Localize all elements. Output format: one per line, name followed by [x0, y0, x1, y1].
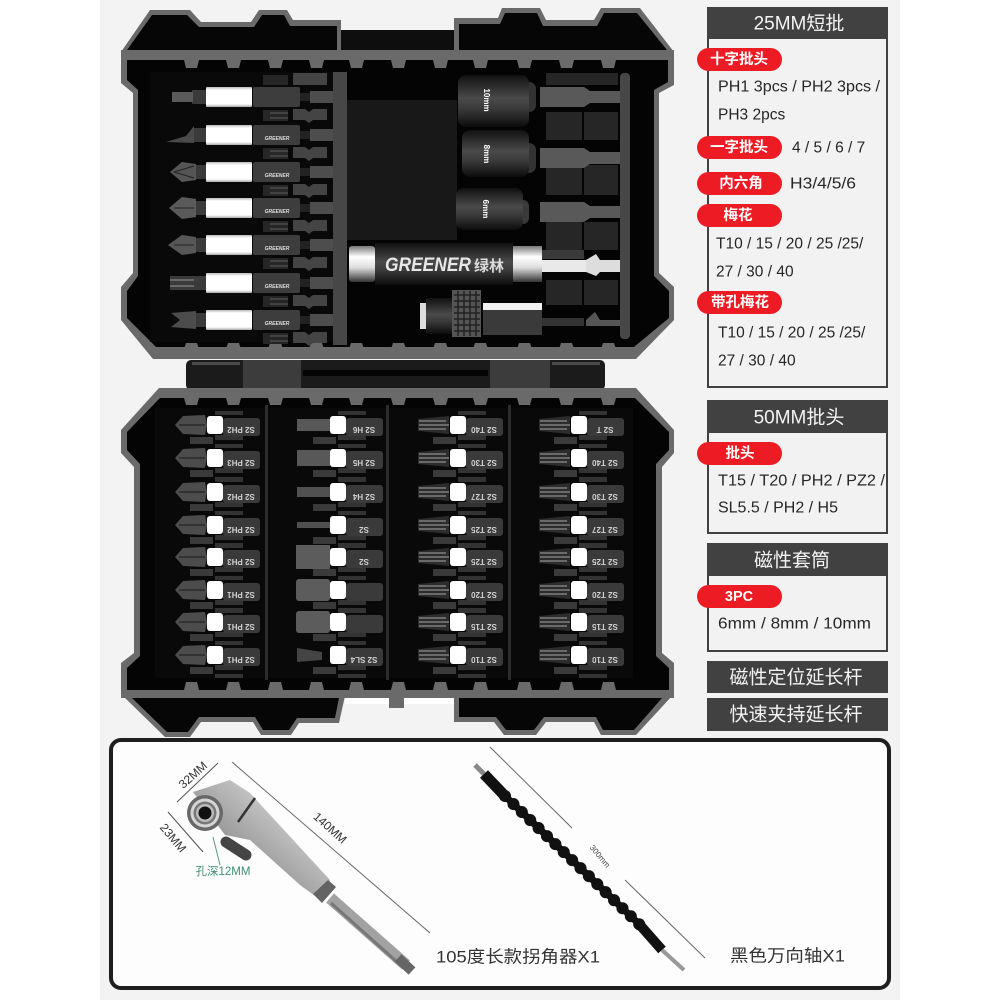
- bit column 3: Torx: S2 T20: [471, 590, 497, 599]
- text: Phillips sizes: PH3 2pcs: [718, 106, 785, 124]
- panel: magnetic sockets: [697, 543, 888, 651]
- seven 25mm bits, left column: GREENER: [265, 246, 290, 252]
- socket 10mm: 10mm: [482, 88, 491, 112]
- bar: magnetic extension: 磁性定位延长杆: [729, 666, 863, 688]
- label: angle adapter: 105度长款拐角器X1: [436, 948, 600, 966]
- callout: hole depth 12MM: [196, 837, 250, 878]
- tag: security Torx: [697, 291, 782, 314]
- heading: sockets: [707, 543, 888, 576]
- text: security Torx sizes: [718, 324, 866, 370]
- panel: accessories: [111, 740, 889, 988]
- panel: 50MM bits: [697, 400, 888, 533]
- bar: quick-release extension: [707, 698, 888, 731]
- bit column 1: Phillips and Pozidriv: S2 PH3: [227, 557, 255, 566]
- tag: 3PC: [697, 585, 782, 608]
- upper tray lid tabs: [121, 8, 674, 52]
- heading: 25MM: 25MM短批: [754, 12, 844, 34]
- magnetic extension bar with GREENER logo: GREENER: [385, 255, 471, 276]
- bit column 1: Phillips and Pozidriv: S2 PH2: [227, 525, 255, 534]
- bit column 2: hex and slotted: [296, 411, 383, 678]
- bit column 4: security Torx: S2 T30: [592, 492, 618, 501]
- socket 10mm: [458, 75, 620, 127]
- heading: 50MM: [707, 400, 888, 433]
- text: security Torx sizes: T10 / 15 / 20 / 25 /25/: [718, 324, 866, 342]
- text: security Torx sizes: 27 / 30 / 40: [718, 352, 796, 370]
- panel: 25MM short bits: [697, 7, 888, 387]
- heading: 25MM: [707, 7, 888, 39]
- bit column 3: Torx: S2 T10: [471, 655, 497, 664]
- lower tray body: [121, 388, 674, 698]
- flexible shaft tool: [475, 765, 684, 970]
- label: flexible shaft: 黑色万向轴X1: [730, 946, 845, 966]
- bit column 3: Torx: S2 T25: [471, 557, 497, 566]
- dimension 32MM: 32MM: [176, 759, 210, 791]
- bar: magnetic extension: [707, 661, 888, 693]
- text: Torx sizes: [716, 236, 864, 280]
- quick-release extension bar: [420, 290, 620, 337]
- tag: slotted: [697, 136, 782, 159]
- bit column 4: security Torx: S2 T: [596, 425, 613, 434]
- upper tray body: [121, 50, 674, 359]
- bit column 4: security Torx: S2 T25: [592, 557, 618, 566]
- text: Phillips sizes: PH1 3pcs / PH2 3pcs /: [718, 78, 881, 96]
- bit column 4: security Torx: S2 T27: [592, 525, 618, 534]
- tag: Phillips: [697, 48, 782, 71]
- seven 25mm bits, left column: GREENER: [265, 136, 290, 142]
- tag: bits: 批头: [726, 444, 754, 462]
- tag: hex: [697, 172, 782, 195]
- magnetic extension bar with GREENER logo: [349, 243, 620, 285]
- bit column 3: Torx: S2 T15: [471, 622, 497, 631]
- text: 50MM sizes: SL5.5 / PH2 / H5: [718, 500, 838, 516]
- dimension 140MM: [232, 762, 430, 933]
- bit column 1: Phillips and Pozidriv: S2 PH1: [227, 622, 255, 631]
- bit column 1: Phillips and Pozidriv: S2 PH3: [227, 458, 255, 467]
- dimension 300mm: 300mm: [588, 843, 612, 870]
- tag: bits: [697, 442, 782, 465]
- text: slotted sizes: 4 / 5 / 6 / 7: [792, 140, 865, 156]
- tag: Phillips: 十字批头: [710, 50, 768, 68]
- bit column 1: Phillips and Pozidriv: S2 PH1: [227, 590, 255, 599]
- bit column 4: security Torx: S2 T10: [592, 655, 618, 664]
- bit column 2: hex and slotted: S2 H5: [352, 458, 375, 467]
- seven 25mm bits, left column: GREENER: [265, 173, 290, 179]
- socket 6mm: 6mm: [481, 200, 490, 218]
- bit column 1: Phillips and Pozidriv: S2 PH2: [227, 492, 255, 501]
- seven 25mm bits, left column: [166, 73, 333, 346]
- tag: security Torx: 带孔梅花: [711, 293, 769, 311]
- tag: Torx: [697, 204, 782, 227]
- bit column 2: hex and slotted: S2: [359, 525, 369, 534]
- bit column 3: Torx: [418, 411, 503, 678]
- dimension 300mm: [490, 747, 705, 958]
- lower tray of the case: [121, 388, 674, 737]
- bit column 2: hex and slotted: S2: [359, 557, 369, 566]
- bit column 3: Torx: S2 T27: [471, 492, 497, 501]
- page background: [100, 0, 900, 1000]
- hinge: [186, 360, 605, 390]
- bit column 3: Torx: S2 T40: [471, 425, 497, 434]
- text: Phillips sizes: [718, 78, 881, 124]
- bar: quick-release extension: 快速夹持延长杆: [729, 704, 863, 726]
- text: hex sizes: H3/4/5/6: [790, 176, 856, 192]
- right holder blocks: [546, 73, 618, 305]
- bit column 1: Phillips and Pozidriv: S2 PH2: [227, 425, 255, 434]
- bit column 4: security Torx: [539, 411, 624, 678]
- right divider bar: [620, 73, 630, 339]
- bit column 2: hex and slotted: S2 H6: [352, 425, 375, 434]
- callout: hole depth 12MM: 孔深12MM: [196, 864, 250, 878]
- tag: slotted: 一字批头: [710, 138, 768, 156]
- text: 50MM sizes: [718, 472, 886, 516]
- socket 6mm: [456, 188, 620, 230]
- bit column 1: Phillips and Pozidriv: S2 PH1: [227, 655, 255, 664]
- socket 8mm: [462, 130, 620, 177]
- bit column 4: security Torx: S2 T20: [592, 590, 618, 599]
- dimension 32MM: [176, 759, 218, 802]
- heading: sockets: 磁性套筒: [754, 550, 830, 572]
- socket 8mm: 8mm: [482, 145, 491, 163]
- heading: 50MM: 50MM批头: [754, 406, 844, 428]
- bit column 1: Phillips and Pozidriv: [175, 411, 260, 678]
- text: socket sizes: 6mm / 8mm / 10mm: [718, 616, 871, 632]
- bit column 3: Torx: S2 T25: [471, 525, 497, 534]
- bit column 4: security Torx: S2 T40: [592, 458, 618, 467]
- dimension 140MM: 140MM: [310, 809, 350, 847]
- text: 50MM sizes: T15 / T20 / PH2 / PZ2 /: [718, 472, 886, 490]
- tag: 3PC: 3PC: [725, 589, 754, 605]
- lower tray lid tabs: [123, 682, 672, 737]
- seven 25mm bits, left column: GREENER: [265, 209, 290, 215]
- bit column 2: hex and slotted: S2 SL4: [350, 655, 377, 664]
- bit column 2: hex and slotted: S2 H4: [352, 492, 375, 501]
- magnetic extension bar with GREENER logo: 绿林: [474, 257, 504, 275]
- left divider bar: [333, 72, 347, 345]
- upper tray of the case: [121, 8, 674, 359]
- tag: Torx: 梅花: [724, 206, 753, 224]
- text: Torx sizes: 27 / 30 / 40: [716, 264, 794, 280]
- text: Torx sizes: T10 / 15 / 20 / 25 /25/: [716, 236, 864, 252]
- dimension 23MM: [157, 812, 203, 855]
- bit column 4: security Torx: S2 T15: [592, 622, 618, 631]
- tag: hex: 内六角: [719, 174, 763, 192]
- seven 25mm bits, left column: GREENER: [265, 284, 290, 290]
- seven 25mm bits, left column: GREENER: [265, 321, 290, 327]
- dimension 23MM: 23MM: [157, 821, 189, 855]
- bit column 3: Torx: S2 T30: [471, 458, 497, 467]
- angle adapter tool: [187, 780, 412, 971]
